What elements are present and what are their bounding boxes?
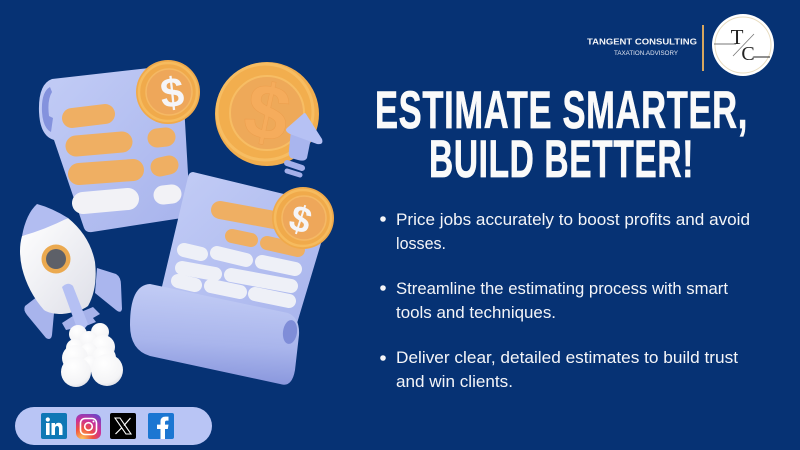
bullet list: [380, 211, 750, 391]
brand header: [587, 14, 774, 76]
logo: [712, 14, 774, 76]
bullet 2: Streamline the estimating process with smart: [396, 280, 728, 298]
bullet 2: [380, 280, 728, 322]
icon: up arrow: [286, 113, 322, 175]
bullet 1: losses.: [396, 235, 446, 253]
divider: [702, 25, 704, 71]
document: upper invoice: [39, 65, 190, 232]
icon: large dollar coin: [215, 62, 319, 166]
icon: large dollar coin: $: [237, 64, 298, 160]
tagline: TAXATION.ADVISORY: [614, 51, 678, 57]
icon: x: [110, 413, 136, 439]
icon: rocket smoke: [61, 323, 123, 387]
icon: instagram: [76, 414, 101, 439]
document: lower invoice with roll: [130, 172, 330, 385]
icon: linkedin: [41, 413, 67, 439]
company name: TANGENT CONSULTING: [587, 36, 697, 46]
icon: facebook: [148, 413, 174, 439]
bullet 2: tools and techniques.: [396, 304, 556, 322]
bullet 1: Price jobs accurately to boost profits and avoid: [396, 211, 750, 229]
heading: [375, 81, 748, 189]
social media bar: [15, 407, 212, 445]
icon: dollar coin on upper invoice: $: [158, 68, 186, 117]
bullet 3: Deliver clear, detailed estimates to build trust: [396, 349, 738, 367]
bullet 1: [380, 211, 750, 253]
bullet 3: [380, 349, 738, 391]
icon: dollar coin on upper invoice: [136, 60, 200, 124]
icon: dollar coin on lower invoice: [272, 187, 334, 249]
icon: dollar coin on lower invoice: $: [284, 197, 317, 242]
icon: rocket: [20, 204, 122, 339]
illustration: invoices, coins and rocket: [20, 60, 334, 387]
logo: T: [731, 25, 744, 49]
bullet 3: and win clients.: [396, 373, 513, 391]
logo: C: [741, 43, 755, 65]
